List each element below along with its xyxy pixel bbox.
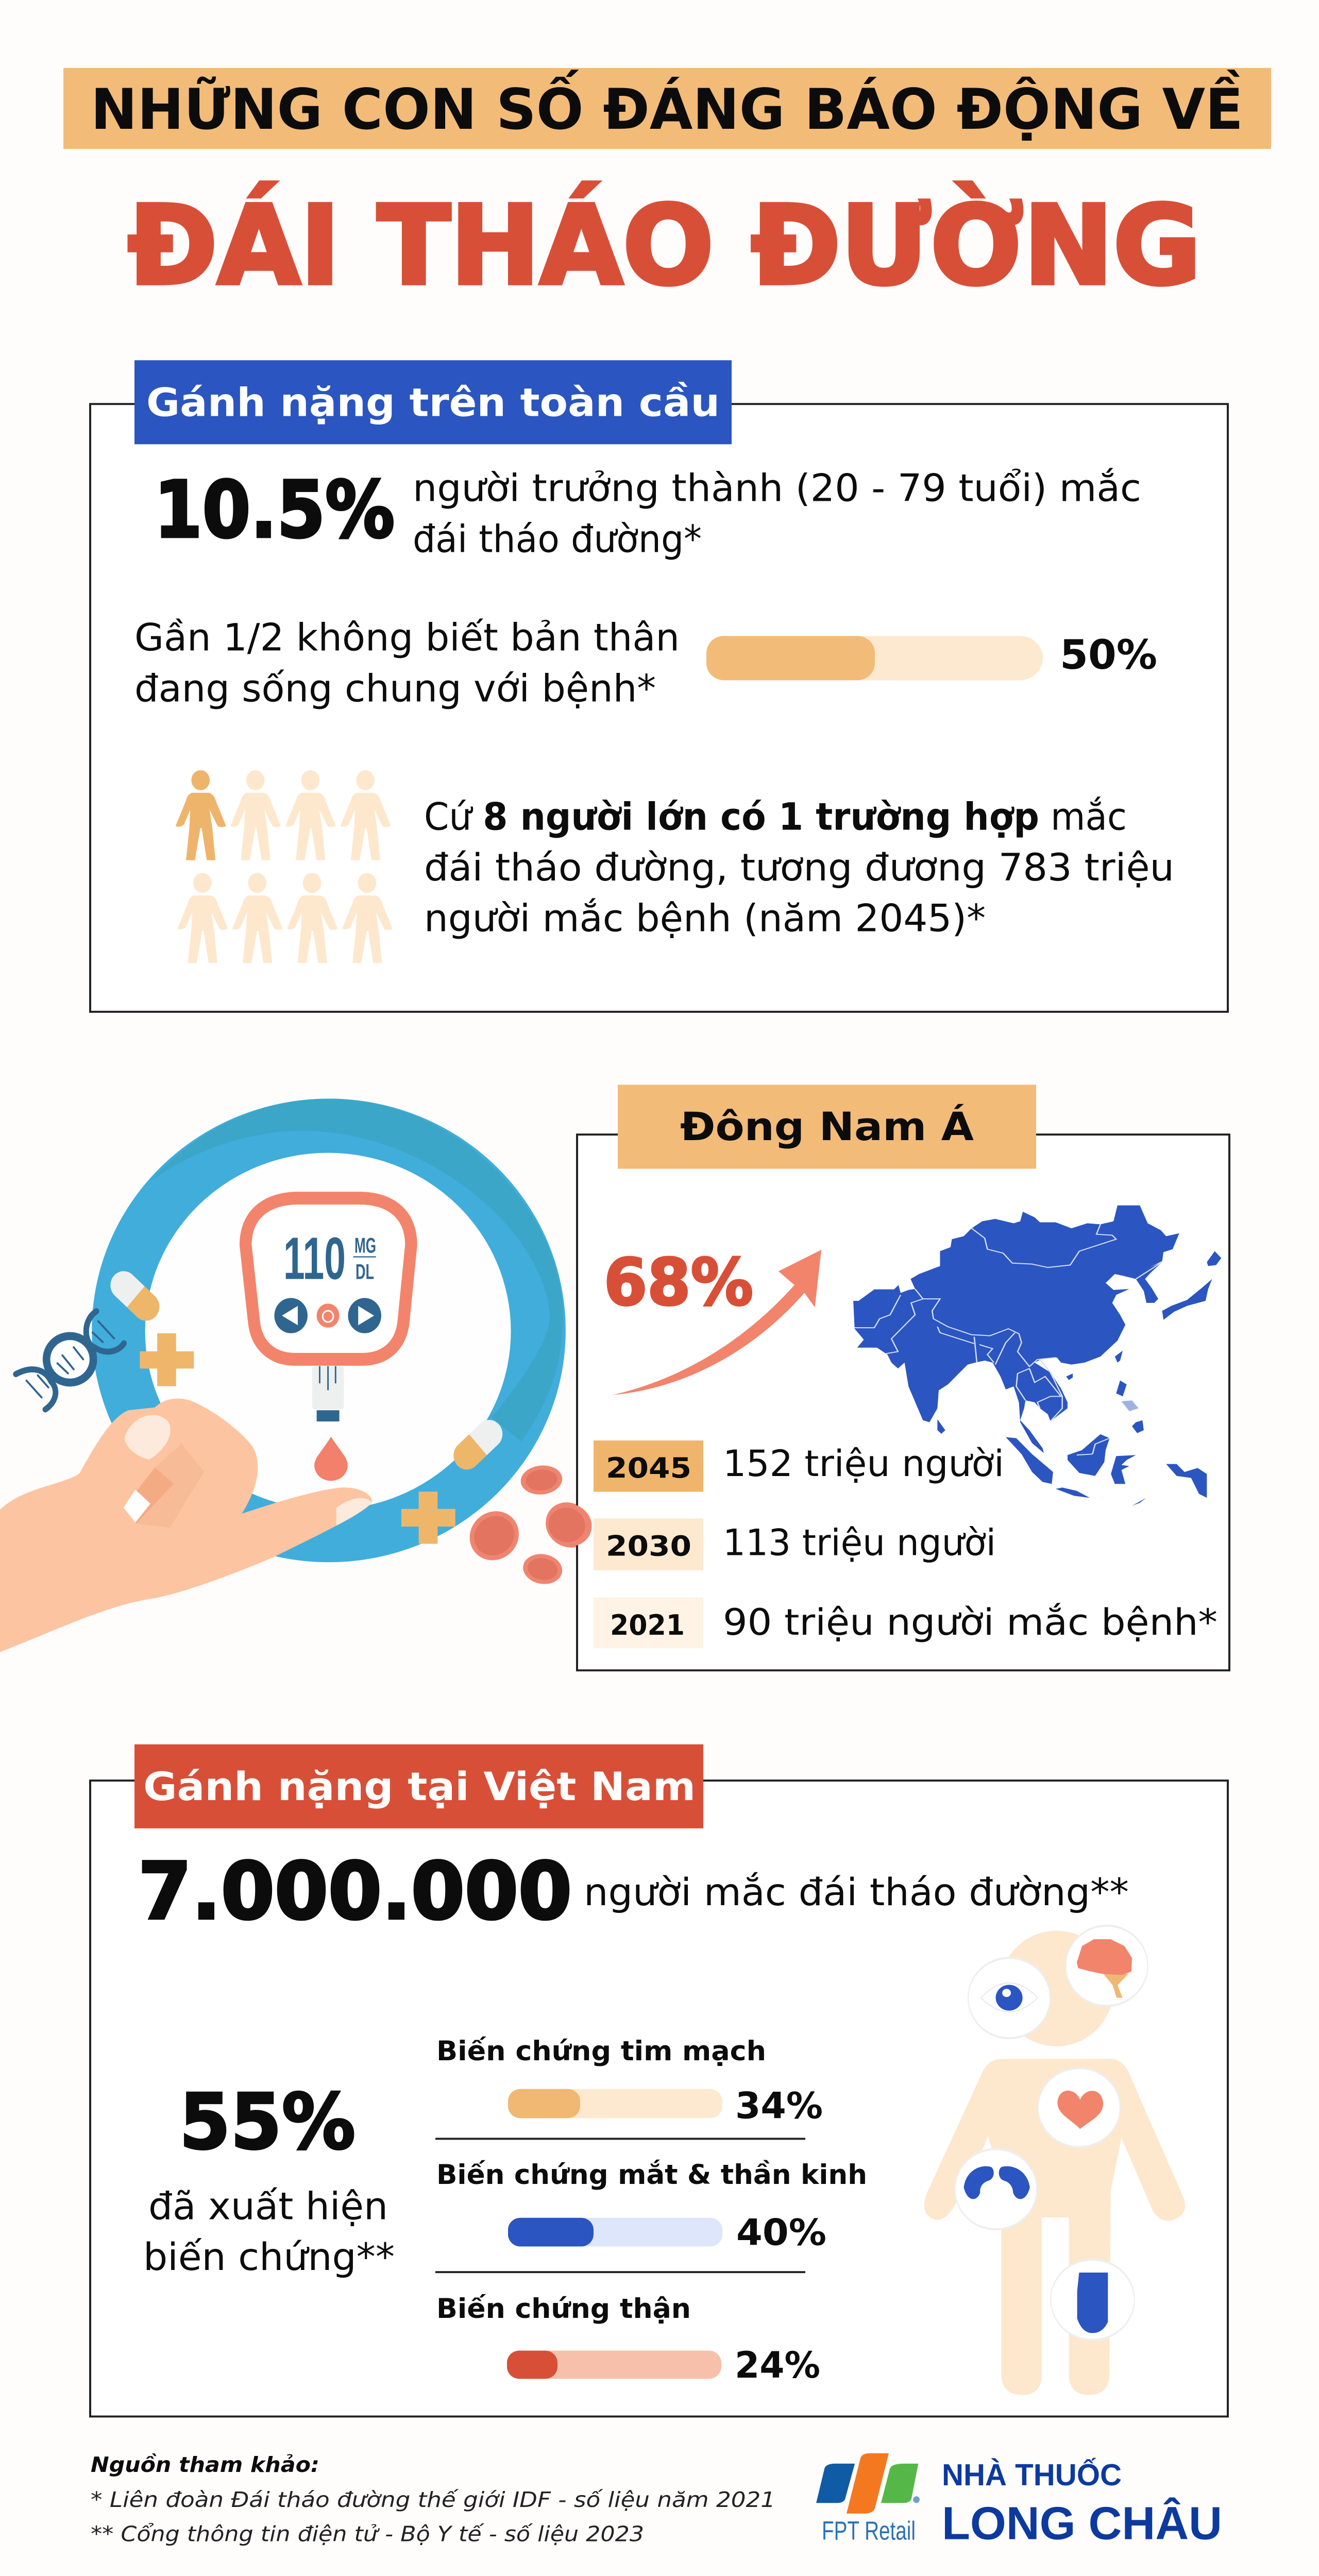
logo: FPT Retail Long Chau: NHÀ THUỐC [942, 2458, 1122, 2492]
meter reading: 110 [283, 1225, 346, 1292]
crosses [140, 1333, 455, 1544]
logo: FPT Retail Long Chau: LONG CHÂU [942, 2498, 1222, 2549]
stat: 68%: 68% [604, 1245, 753, 1320]
icon: FPT mark [816, 2453, 920, 2514]
bar: cardiovascular 34% [436, 2035, 823, 2127]
bar: kidney 24%: 24% [735, 2344, 820, 2386]
panel heading: Gánh nặng trên toàn cầu [146, 380, 720, 426]
text: with complications [143, 2184, 395, 2279]
icon: eight people, one highlighted [176, 770, 393, 963]
panel heading: Đông Nam Á [680, 1104, 974, 1150]
bar: eye and nerve 40%: Biến chứng mắt & thần kinh [436, 2159, 867, 2191]
text: adults with diabetes: người trưởng thành (20 - 79 tuổi) mắc [413, 466, 1141, 510]
panel: global burden [90, 360, 1228, 1012]
text: half unaware [134, 616, 680, 710]
references: * Liên đoàn Đái tháo đường thế giới IDF - số liệu năm 2021 [91, 2487, 775, 2512]
icon: stomach [1077, 2273, 1108, 2333]
panel heading [618, 1084, 1036, 1169]
stat: 55%: 55% [179, 2078, 356, 2166]
logo: FPT Retail Long Chau [816, 2453, 1222, 2549]
timeline: 2030: 2030 [606, 1530, 691, 1563]
text: with complications: biến chứng** [143, 2235, 395, 2279]
bar: eye and nerve 40% [436, 2159, 867, 2253]
logo: FPT Retail Long Chau: FPT Retail [822, 2516, 916, 2546]
text: half unaware: Gần 1/2 không biết bản thân [134, 616, 680, 659]
text: 1 in 8 adults: đái tháo đường, tương đương 783 triệu [424, 846, 1174, 890]
bar: eye and nerve 40%: 40% [736, 2211, 826, 2253]
map: Asia [853, 1206, 1221, 1506]
timeline: 2021: 2021 [610, 1609, 685, 1642]
illustration: glucose meter in ring with hand [0, 1099, 599, 1652]
text: half unaware: đang sống chung với bệnh* [134, 667, 656, 710]
progress bar: 50%: 50% [1060, 632, 1157, 679]
icon: eye [981, 1983, 1038, 2012]
icon: heart [1057, 2091, 1103, 2129]
icon: kidneys [964, 2166, 1030, 2199]
text: 1 in 8 adults: người mắc bệnh (năm 2045)* [424, 896, 986, 940]
panel: Southeast Asia [577, 1084, 1229, 1670]
bar: cardiovascular 34%: 34% [735, 2084, 823, 2127]
text: with complications: đã xuất hiện [148, 2184, 388, 2228]
timeline: 2021: 90 triệu người mắc bệnh* [723, 1601, 1217, 1643]
text: 1 in 8 adults [424, 795, 1174, 940]
text: adults with diabetes [413, 466, 1141, 561]
timeline: 2045 [594, 1440, 1004, 1492]
stat: 10.5%: 10.5% [154, 465, 395, 556]
progress bar: 50% [706, 632, 1157, 680]
meter reading: MG [354, 1234, 376, 1258]
timeline: 2030 [594, 1518, 996, 1570]
panel: Vietnam burden [90, 1744, 1228, 2416]
main title: ĐÁI THÁO ĐƯỜNG [128, 182, 1201, 309]
bar: kidney 24%: Biến chứng thận [436, 2293, 691, 2325]
references: ** Cổng thông tin điện tử - Bộ Y tế - số liệu 2023 [91, 2521, 644, 2546]
icon: red blood cell overlapping panel [538, 1496, 599, 1554]
hand [0, 1399, 372, 1652]
DNA [16, 1311, 124, 1410]
bar: cardiovascular 34%: Biến chứng tim mạch [436, 2035, 766, 2067]
arrow: rising trend [612, 1250, 821, 1395]
bar: kidney 24% [436, 2293, 820, 2386]
panel heading [134, 1744, 703, 1828]
text: people with diabetes: người mắc đái tháo đường** [584, 1871, 1129, 1914]
panel heading: Gánh nặng tại Việt Nam [143, 1764, 696, 1810]
timeline: 2045: 152 triệu người [723, 1443, 1004, 1485]
stat: 7,000,000: 7.000.000 [138, 1846, 572, 1937]
timeline: 2021 [594, 1598, 1217, 1648]
blood cells [462, 1464, 599, 1587]
pills [105, 1265, 508, 1475]
ring [92, 1099, 566, 1562]
timeline: 2045: 2045 [606, 1452, 691, 1485]
references [91, 2452, 775, 2546]
title banner: NHỮNG CON SỐ ĐÁNG BÁO ĐỘNG VỀ [91, 69, 1243, 142]
text: adults with diabetes: đái tháo đường* [413, 517, 702, 561]
references: Nguồn tham khảo: [91, 2452, 319, 2477]
meter reading: DL [356, 1260, 374, 1284]
icon: brain [1077, 1939, 1132, 1998]
text: 1 in 8 adults: Cứ 8 người lớn có 1 trường hợp mắc [424, 795, 1127, 839]
timeline: 2030: 113 triệu người [723, 1521, 996, 1564]
panel heading [134, 360, 732, 444]
glucose meter [246, 1198, 411, 1481]
illustration: body with organ icons [924, 1926, 1185, 2395]
